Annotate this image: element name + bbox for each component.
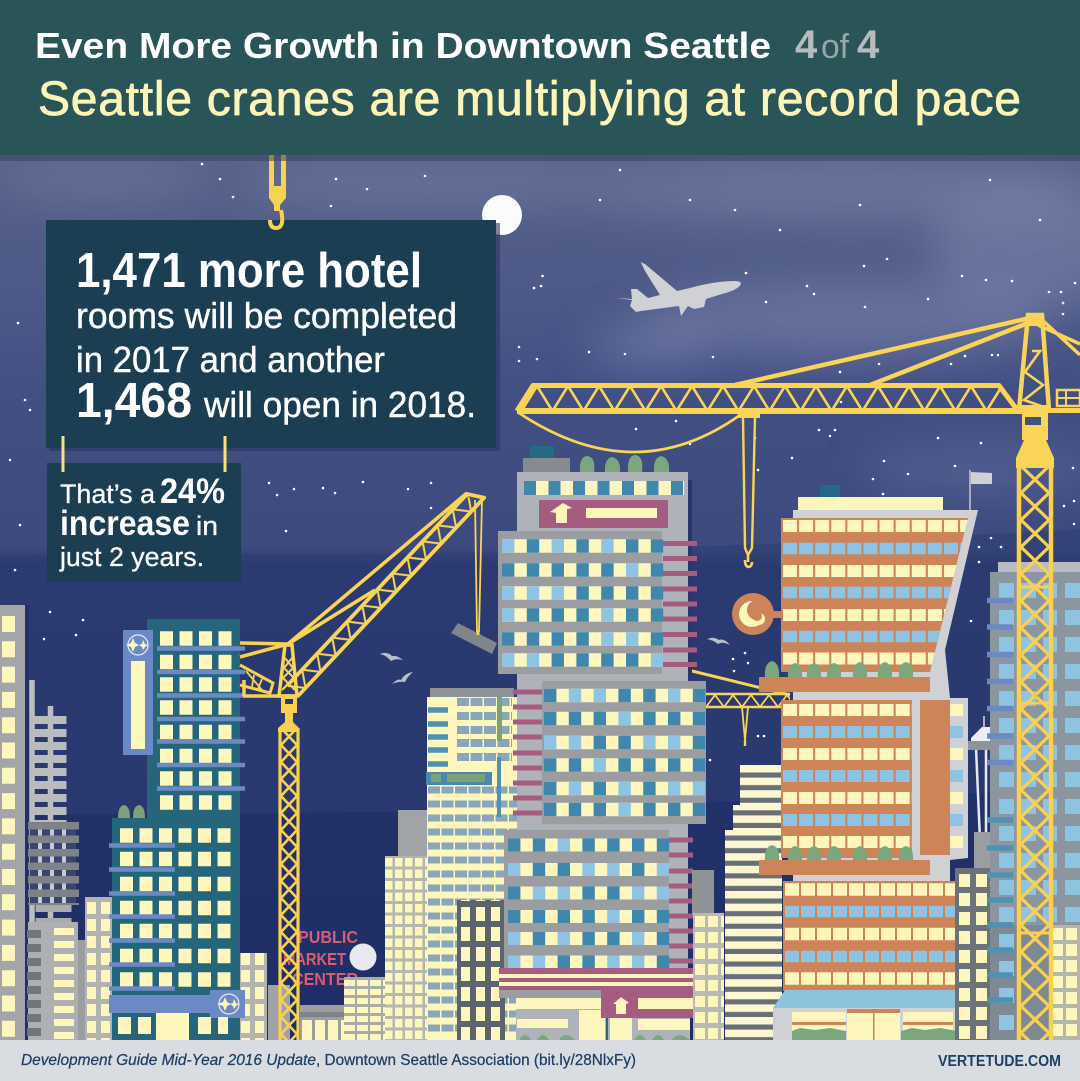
- hoist: [475, 500, 482, 635]
- secondary callout: increase: [60, 504, 190, 543]
- page counter: [795, 23, 880, 67]
- main callout: 1,471 more hotel: [76, 244, 422, 298]
- secondary callout: That’s a: [60, 479, 156, 509]
- stars: [10, 164, 1075, 760]
- birds: [380, 638, 730, 684]
- mast: [1019, 466, 1051, 1040]
- grid buildings around hotel: [692, 870, 724, 1040]
- bushes: [118, 805, 145, 818]
- source title: Development Guide Mid-Year 2016 Update: [21, 1052, 316, 1069]
- sign: Public Market Center: PUBLIC: [298, 927, 358, 947]
- footer bar: [0, 1040, 1080, 1081]
- counter jib: [240, 643, 298, 696]
- main callout: 1,468: [76, 374, 192, 428]
- middle block: [542, 681, 706, 824]
- cream mid-rise building: [426, 688, 517, 1040]
- upper block: [781, 518, 980, 673]
- right balconies upper: [663, 544, 697, 664]
- upper block: [498, 531, 663, 674]
- neck: [1016, 405, 1054, 468]
- sign: base badge: [210, 990, 245, 1018]
- crane hook from header: [269, 155, 286, 228]
- heading line 2: Seattle cranes are multiplying at record pace: [38, 73, 1021, 126]
- low buildings centre left: [300, 810, 428, 1040]
- podium with stripes: [499, 968, 705, 1040]
- brand: VERTETUDE.COM: [938, 1053, 1061, 1070]
- main callout: rooms will be completed: [76, 295, 457, 336]
- sign: vertical blade: [123, 630, 153, 755]
- icon: crane hook: [743, 417, 755, 567]
- top frame: [279, 645, 297, 696]
- lower balconies: [109, 846, 175, 988]
- secondary callout: [47, 463, 241, 582]
- lower block: [504, 830, 669, 970]
- main callout: [46, 220, 500, 451]
- heading line 1: Even More Growth in Downtown Seattle: [35, 25, 771, 66]
- icon: airplane: [616, 262, 741, 316]
- upper windows: [160, 638, 232, 802]
- moon: [482, 195, 522, 235]
- stays: [288, 493, 467, 644]
- secondary callout: just 2 years.: [59, 542, 204, 572]
- entrance awning: [773, 990, 970, 1008]
- top frame: [1019, 314, 1049, 410]
- jib: [287, 487, 484, 696]
- rooftop window band: [524, 481, 684, 495]
- back stays: [1038, 318, 1080, 355]
- source publisher: , Downtown Seattle Association (bit.ly/28NlxFy): [316, 1052, 636, 1069]
- bushes lower: [765, 845, 913, 860]
- lower block: [783, 881, 961, 991]
- mast: [280, 728, 298, 1040]
- dark grid building right of hotel: [955, 868, 991, 1040]
- neck: [278, 696, 299, 732]
- teal building left: [109, 619, 245, 1040]
- counter jib cabin: [1040, 390, 1080, 413]
- clock: [350, 944, 376, 970]
- header shadow strip: [0, 155, 1080, 161]
- ground floor: [118, 1017, 228, 1034]
- planter lower: [759, 860, 930, 875]
- striped high-rise: [725, 765, 782, 1040]
- grey-blue tower right: [987, 562, 1080, 1040]
- left tower crane: [240, 487, 484, 1040]
- base band: [109, 995, 212, 1013]
- callout hangers: [63, 436, 225, 472]
- page counter: of: [821, 28, 850, 66]
- background buildings left: [0, 605, 290, 1040]
- bushes upper: [765, 661, 913, 677]
- right tower crane: [1016, 314, 1080, 1040]
- sign: Public Market Center: [283, 927, 358, 989]
- central hotel tower: [451, 446, 706, 1040]
- sign: Public Market Center: CENTER: [292, 969, 358, 989]
- flag: [970, 470, 992, 512]
- left balconies middle: [513, 692, 542, 813]
- small background crane: [688, 670, 790, 746]
- main callout: will open in 2018.: [203, 384, 476, 425]
- lower windows: [120, 836, 232, 980]
- header banner: [0, 0, 1080, 155]
- rooftop: mechanical block and bushes: [523, 446, 669, 472]
- main callout: in 2017 and another: [76, 339, 385, 380]
- sign: hotel top: [539, 500, 668, 528]
- entrance: [773, 1008, 970, 1040]
- secondary callout: in: [196, 511, 218, 541]
- planter upper: [759, 677, 930, 692]
- space needle: [968, 716, 992, 870]
- page counter: 4: [857, 23, 880, 67]
- sign: Public Market Center: MARKET: [283, 949, 346, 969]
- sign: round logo: [732, 593, 782, 635]
- middle block: [781, 700, 912, 858]
- big crane jib and hoist: [517, 318, 1037, 567]
- sign: hotel podium: [601, 988, 705, 1018]
- page counter: 4: [795, 23, 818, 67]
- upper balconies: [157, 648, 245, 788]
- secondary callout: 24%: [160, 472, 225, 511]
- side panel: [920, 700, 956, 855]
- orange hotel tower: [732, 485, 980, 1040]
- slab hanging from crane: [451, 623, 497, 654]
- right balconies lower: [669, 840, 693, 961]
